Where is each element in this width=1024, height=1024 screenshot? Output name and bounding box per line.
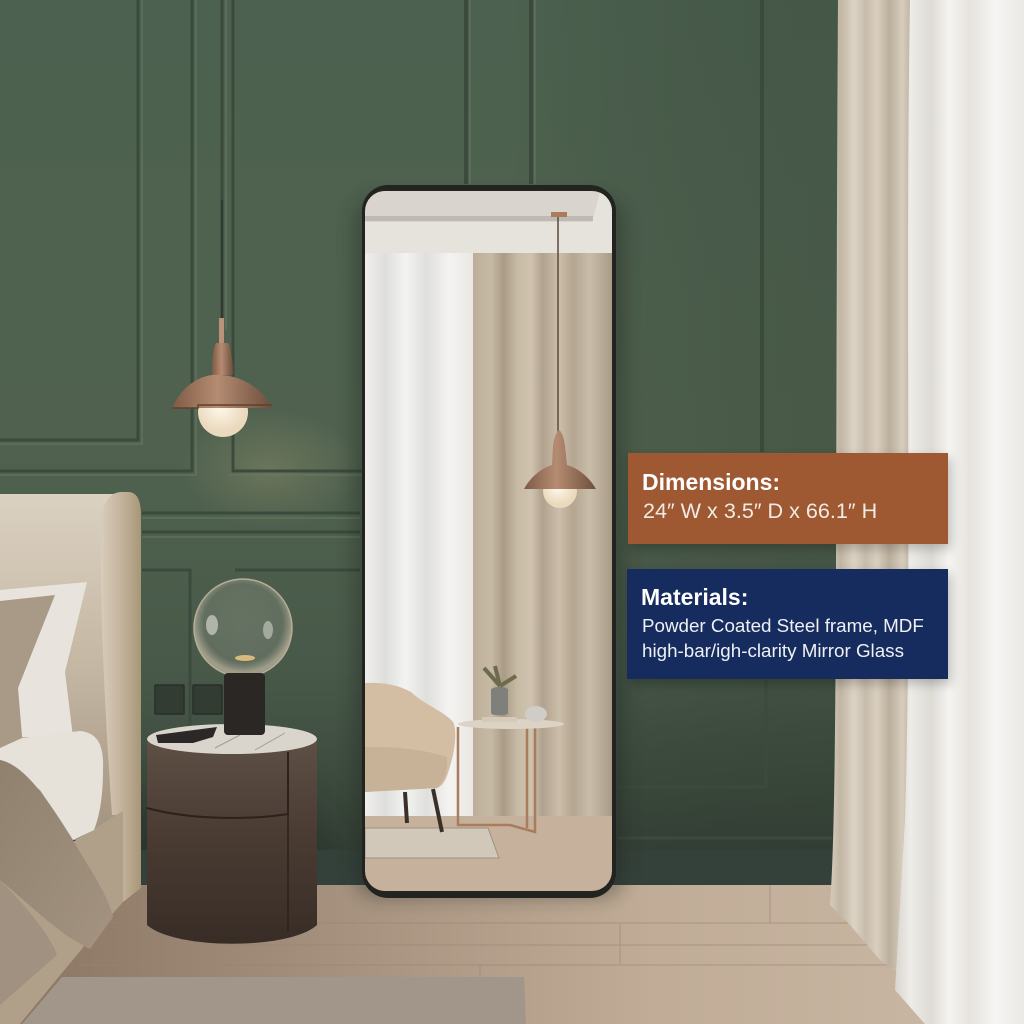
pillow white <box>0 582 87 737</box>
bed base <box>0 811 123 1024</box>
reflected sheer curtains <box>365 253 477 818</box>
mirror <box>362 185 616 898</box>
reflected rug <box>365 828 499 858</box>
bed throw <box>0 760 113 949</box>
mirror shadow <box>352 195 627 900</box>
callout heading: materials: Materials: <box>641 584 748 610</box>
pillow taupe <box>0 595 55 748</box>
rug <box>22 977 526 1024</box>
reflected floor <box>365 816 612 892</box>
callout heading: dimensions: Dimensions: <box>642 469 780 495</box>
callout: dimensions <box>628 453 948 544</box>
reflected beige curtains <box>473 253 612 816</box>
wall panel mouldings <box>0 0 832 838</box>
callout body: materials <box>642 615 924 661</box>
lower duvet <box>0 880 57 1005</box>
callout: materials <box>627 569 948 679</box>
white sheer curtain <box>895 0 1024 1024</box>
callout body: materials: Powder Coated Steel frame, MDF <box>642 615 924 636</box>
mirror frame <box>362 185 616 898</box>
mattress sheet <box>0 731 103 840</box>
beige curtain <box>830 0 915 985</box>
pendant lamp <box>172 200 272 437</box>
wall <box>0 0 840 990</box>
reflected ceiling <box>365 191 612 253</box>
book <box>156 727 217 743</box>
marble top <box>147 724 317 754</box>
table lamp <box>194 579 292 735</box>
callout value: dimensions: 24″ W x 3.5″ D x 66.1″ H <box>643 498 877 523</box>
wall sockets <box>155 685 222 714</box>
callout body: materials: high-bar/igh-clarity Mirror Glass <box>642 640 904 661</box>
reflected pendant lamp <box>524 212 596 508</box>
headboard <box>0 492 141 902</box>
reflected side table <box>458 666 564 832</box>
skirting <box>140 850 835 886</box>
floor <box>0 885 935 1024</box>
reflected chair <box>365 683 455 832</box>
nightstand <box>147 724 317 944</box>
